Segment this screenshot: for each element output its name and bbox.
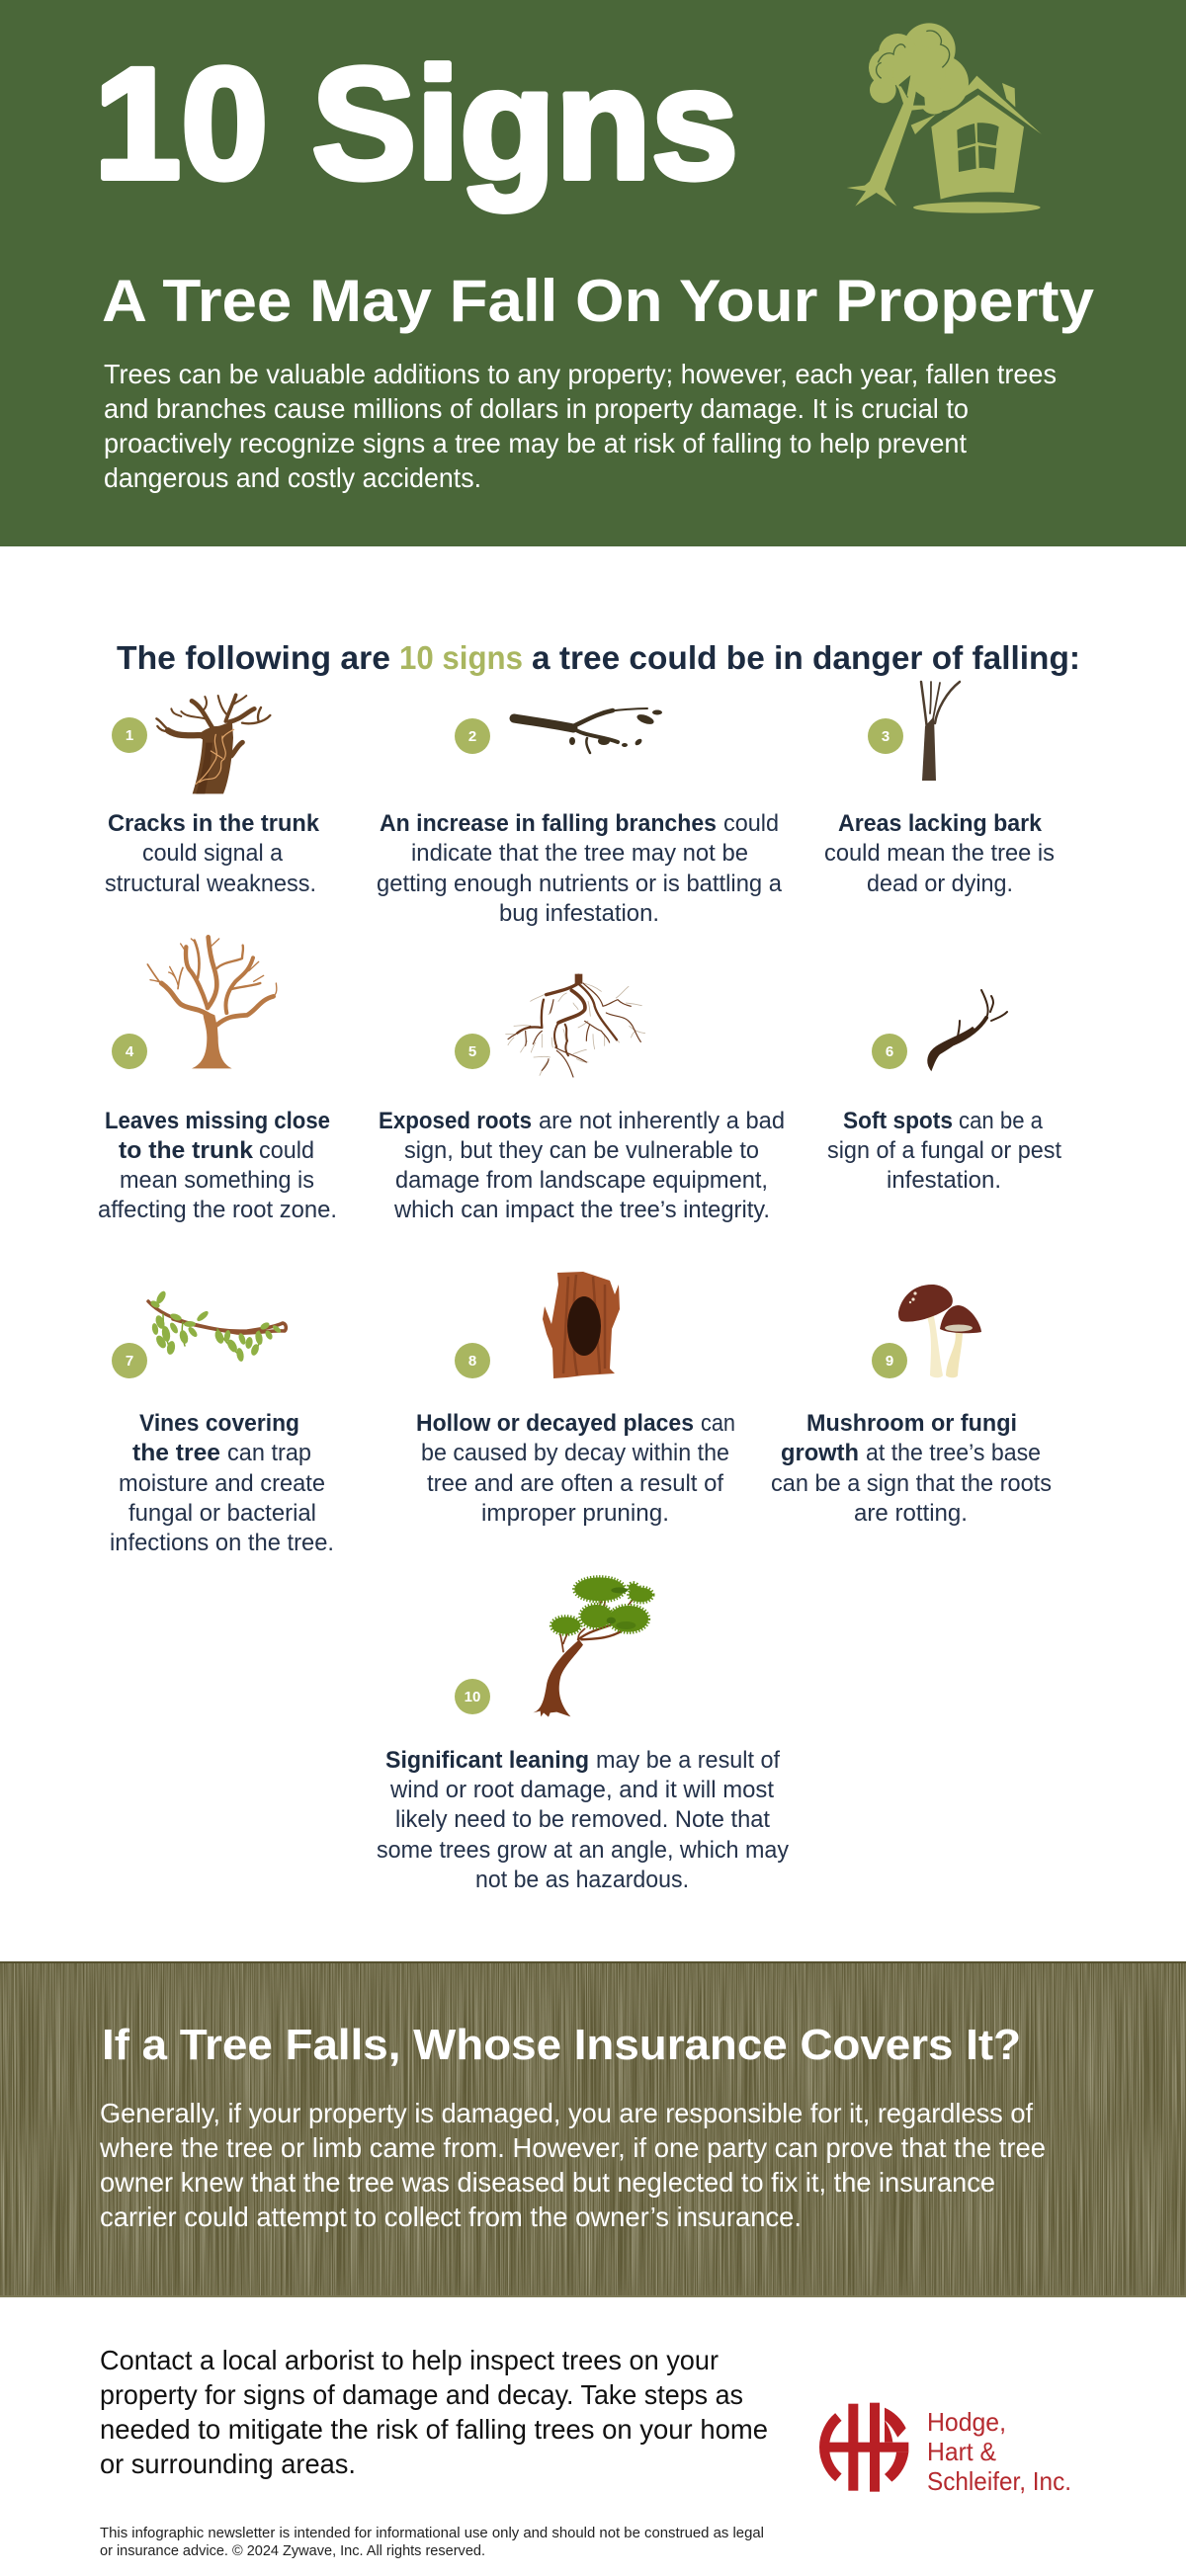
description 1: could signal a <box>142 840 283 867</box>
insurance paragraph <box>99 2098 1046 2232</box>
description 2: could <box>723 810 779 837</box>
description 4: Leaves missing close <box>105 1108 330 1134</box>
badge 10 <box>455 1679 490 1714</box>
item 9: mushrooms <box>771 1285 1052 1527</box>
description 10: some trees grow at an angle, which may <box>377 1837 790 1864</box>
badge 7 <box>112 1343 147 1378</box>
icon: vine covered branch <box>148 1289 286 1363</box>
badge 10: 10 <box>465 1689 480 1705</box>
description 5: are not inherently a bad <box>539 1108 785 1134</box>
contact paragraph: property for signs of damage and decay. Take steps as <box>100 2379 743 2410</box>
description 5: which can impact the tree’s integrity. <box>393 1197 770 1223</box>
description 9: Mushroom or fungi <box>806 1410 1017 1437</box>
item 7: vines <box>110 1289 334 1556</box>
logo name: Hart & <box>927 2437 996 2466</box>
description 2: indicate that the tree may not be <box>411 840 748 867</box>
description 9: growth <box>781 1440 859 1466</box>
insurance paragraph: Generally, if your property is damaged, you are responsible for it, regardless of <box>100 2098 1033 2128</box>
logo mark <box>820 2403 908 2492</box>
insurance paragraph: carrier could attempt to collect from the owner’s insurance. <box>100 2202 802 2232</box>
contact paragraph: needed to mitigate the risk of falling trees on your home <box>100 2414 768 2445</box>
description 9: at the tree’s base <box>866 1440 1041 1466</box>
insurance paragraph: owner knew that the tree was diseased but neglected to fix it, the insurance <box>100 2167 995 2198</box>
icon: cracked trunk <box>156 695 270 793</box>
description 10: Significant leaning <box>385 1747 589 1774</box>
intro paragraph: and branches cause millions of dollars in property damage. It is crucial to <box>104 393 969 424</box>
description 4: mean something is <box>120 1167 314 1194</box>
badge 8: 8 <box>468 1353 476 1370</box>
description 3: Areas lacking bark <box>838 810 1042 837</box>
badge 4: 4 <box>126 1043 134 1060</box>
description 4 <box>98 1108 337 1223</box>
logo name <box>927 2407 1071 2496</box>
icon: dark branch <box>929 990 1007 1068</box>
subtitle: A Tree May Fall On Your Property <box>102 268 1095 334</box>
icon: hollow stump <box>543 1272 620 1378</box>
insurance heading: If a Tree Falls, Whose Insurance Covers It? <box>102 2021 1021 2069</box>
description 10: not be as hazardous. <box>475 1867 689 1893</box>
item 4: leaves missing <box>98 937 337 1223</box>
badge 5 <box>455 1034 490 1069</box>
intro paragraph: dangerous and costly accidents. <box>104 462 481 493</box>
badge 5: 5 <box>468 1043 476 1060</box>
description 8: can <box>701 1410 735 1437</box>
disclaimer <box>100 2525 764 2559</box>
description 5: damage from landscape equipment, <box>395 1167 768 1194</box>
description 7 <box>110 1410 334 1556</box>
logo name: Hodge, <box>927 2407 1006 2437</box>
intro paragraph <box>104 359 1057 493</box>
badge 9 <box>872 1343 907 1378</box>
description 6 <box>827 1108 1061 1194</box>
description 3: could mean the tree is <box>824 840 1055 867</box>
icon: tree falling on house <box>847 23 1042 213</box>
disclaimer: or insurance advice. © 2024 Zywave, Inc. All rights reserved. <box>100 2542 485 2559</box>
description 1: structural weakness. <box>105 871 316 897</box>
description 2: getting enough nutrients or is battling a <box>377 871 782 897</box>
insurance paragraph: where the tree or limb came from. However, if one party can prove that the tree <box>99 2132 1046 2163</box>
item 3: areas lacking bark <box>824 682 1055 897</box>
description 1 <box>105 810 319 897</box>
heading: the following are 10 signs: 10 signs <box>399 639 523 676</box>
description 6: Soft spots <box>843 1108 953 1134</box>
description 9 <box>771 1410 1052 1527</box>
wood grain background <box>0 1961 1186 2297</box>
description 8: Hollow or decayed places <box>416 1410 694 1437</box>
badge 2 <box>455 718 490 754</box>
contact paragraph: or surrounding areas. <box>100 2449 356 2479</box>
description 10 <box>377 1747 790 1893</box>
heading: the following are 10 signs <box>117 639 1080 676</box>
description 1: Cracks in the trunk <box>108 810 319 837</box>
badge 1: 1 <box>126 727 133 744</box>
description 7: infections on the tree. <box>110 1530 334 1556</box>
item 1: cracks in the trunk <box>105 695 319 897</box>
description 5: sign, but they can be vulnerable to <box>404 1137 759 1164</box>
description 7: moisture and create <box>119 1470 325 1497</box>
description 10: wind or root damage, and it will most <box>389 1777 774 1803</box>
description 2 <box>377 810 782 927</box>
logo name: Schleifer, Inc. <box>927 2466 1071 2496</box>
description 7: the tree <box>132 1440 220 1466</box>
badge 3 <box>868 718 903 754</box>
item 6: soft spots <box>827 990 1061 1194</box>
description 4: could <box>259 1137 314 1164</box>
item 10: significant leaning <box>377 1577 790 1893</box>
description 5 <box>379 1108 785 1223</box>
description 9: can be a sign that the roots <box>771 1470 1052 1497</box>
disclaimer: This infographic newsletter is intended for informational use only and should not be construed as legal <box>100 2525 764 2541</box>
badge 6 <box>872 1034 907 1069</box>
contact paragraph <box>100 2345 768 2479</box>
description 7: can trap <box>227 1440 311 1466</box>
badge 9: 9 <box>886 1353 893 1370</box>
description 3: dead or dying. <box>867 871 1013 897</box>
item 5: exposed roots <box>379 974 785 1223</box>
description 8 <box>416 1410 735 1527</box>
intro paragraph: proactively recognize signs a tree may be at risk of falling to help prevent <box>104 428 967 458</box>
title: 10 Signs: 10 Signs <box>94 35 738 211</box>
description 10: likely need to be removed. Note that <box>395 1806 770 1833</box>
description 2: An increase in falling branches <box>380 810 717 837</box>
description 4: to the trunk <box>119 1137 253 1164</box>
icon: mushrooms <box>898 1285 981 1377</box>
description 4: affecting the root zone. <box>98 1197 337 1223</box>
icon: branch with falling leaves <box>514 708 662 753</box>
item 8: hollow or decayed <box>416 1272 735 1527</box>
description 8: be caused by decay within the <box>421 1440 729 1466</box>
icon: bare tree <box>147 937 277 1068</box>
contact paragraph: Contact a local arborist to help inspect trees on your <box>100 2345 719 2375</box>
description 3 <box>824 810 1055 897</box>
badge 2: 2 <box>468 728 476 745</box>
intro paragraph: Trees can be valuable additions to any property; however, each year, fallen trees <box>104 359 1057 389</box>
description 9: are rotting. <box>854 1500 968 1527</box>
description 5: Exposed roots <box>379 1108 532 1134</box>
description 6: infestation. <box>887 1167 1001 1194</box>
panel: header <box>0 0 1186 546</box>
description 7: fungal or bacterial <box>128 1500 316 1527</box>
item 2: falling branches <box>377 708 782 927</box>
description 6: can be a <box>959 1108 1043 1134</box>
badge 3: 3 <box>882 728 890 745</box>
heading: the following are 10 signs: a tree could be in danger of falling: <box>532 639 1080 676</box>
badge 7: 7 <box>126 1353 133 1370</box>
description 8: tree and are often a result of <box>427 1470 723 1497</box>
description 7: Vines covering <box>139 1410 299 1437</box>
description 6: sign of a fungal or pest <box>827 1137 1061 1164</box>
heading: the following are 10 signs: The following are <box>117 639 390 676</box>
icon: exposed roots <box>506 974 645 1077</box>
icon: bare trunk <box>921 682 960 781</box>
description 10: may be a result of <box>596 1747 780 1774</box>
description 2: bug infestation. <box>499 900 659 927</box>
icon: leaning tree <box>533 1577 652 1717</box>
panel: insurance <box>0 1961 1186 2297</box>
badge 6: 6 <box>886 1043 893 1060</box>
badge 4 <box>112 1034 147 1069</box>
description 8: improper pruning. <box>481 1500 669 1527</box>
logo: Hodge, Hart & Schleifer <box>820 2403 1071 2496</box>
badge 1 <box>112 717 147 753</box>
badge 8 <box>455 1343 490 1378</box>
